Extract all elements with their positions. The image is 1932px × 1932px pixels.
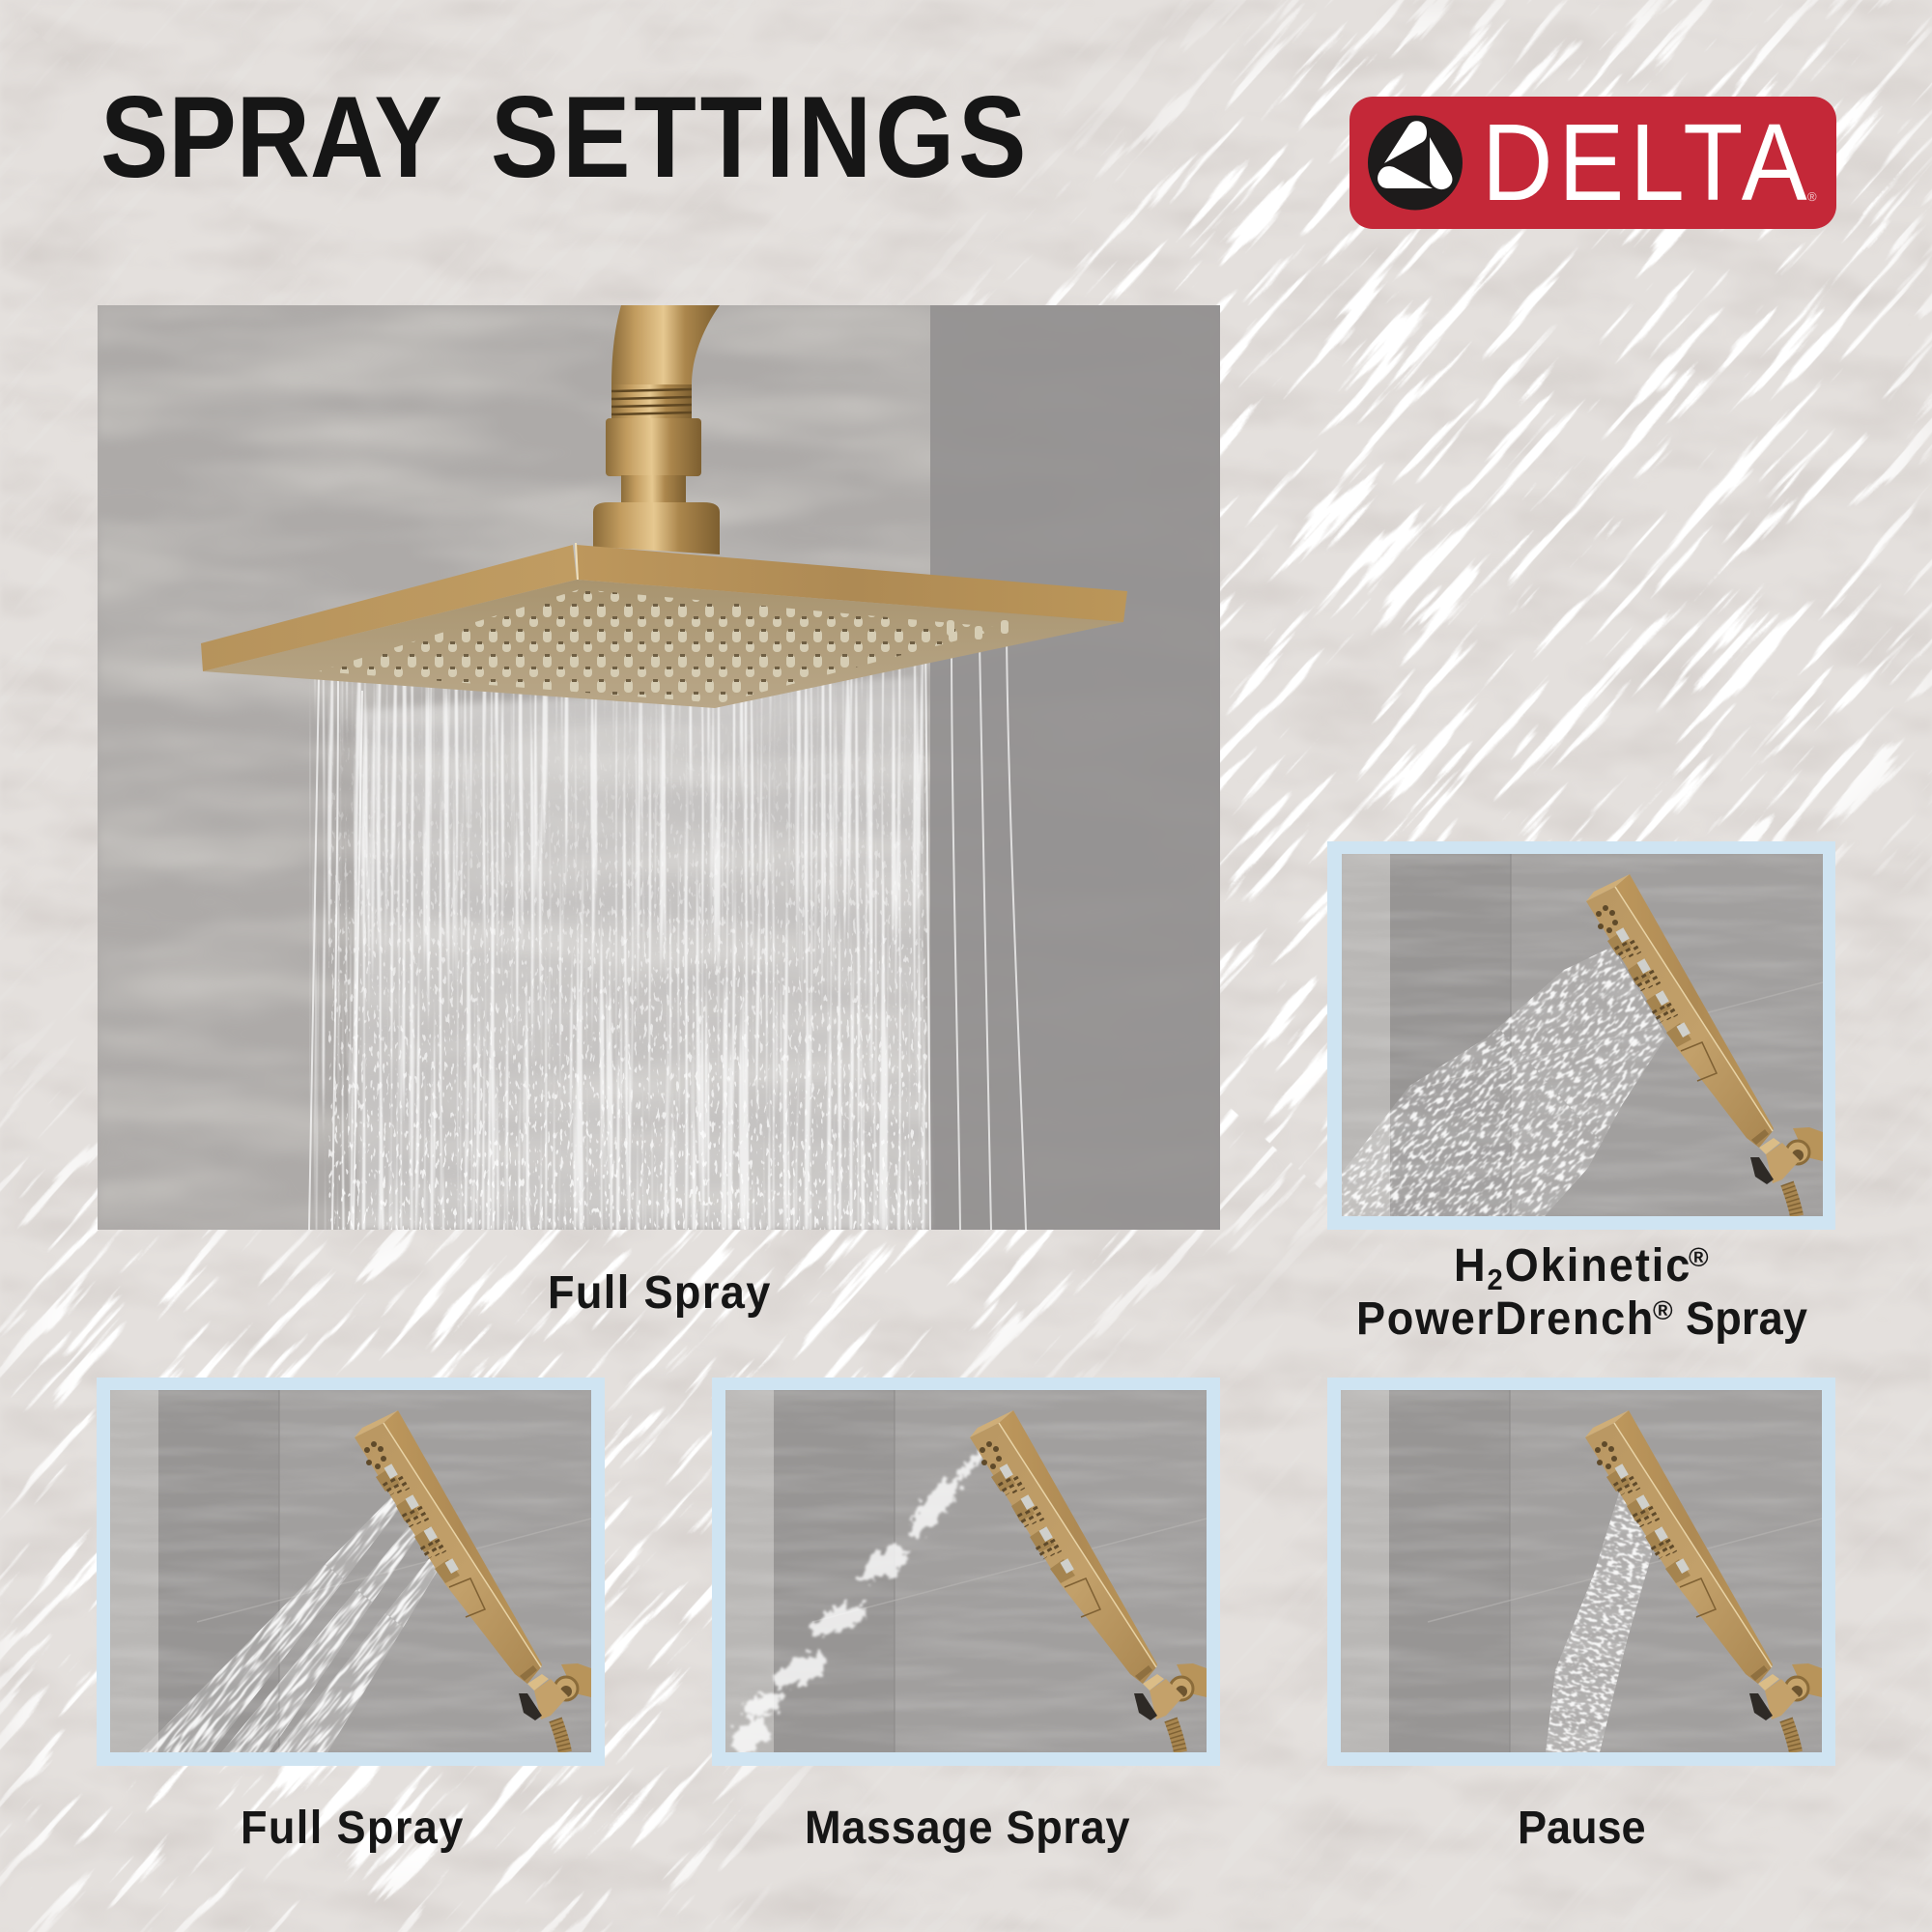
panel: rain shower head photo: [98, 305, 1220, 1230]
photo: hand shower pause: [1341, 1390, 1822, 1752]
shower arm: [611, 305, 720, 384]
panel: H2Okinetic PowerDrench spray: [1327, 841, 1835, 1230]
panel: hand shower full spray: [97, 1378, 605, 1766]
Delta logo: [1350, 97, 1836, 229]
label: Full Spray (rain head): Full Spray: [548, 1266, 770, 1318]
label: Full Spray (hand shower): Full Spray: [241, 1802, 463, 1853]
photo: hand shower massage spray: [724, 1390, 1207, 1762]
threaded connector: [611, 384, 692, 419]
label: H2Okinetic PowerDrench Spray: 2: [1488, 1264, 1503, 1296]
title: [100, 72, 1026, 201]
panel: hand shower pause trickle: [1327, 1378, 1835, 1766]
photo wall: [98, 305, 1220, 1230]
shower head: [201, 543, 1127, 708]
label: Massage Spray: Massage Spray: [805, 1802, 1130, 1853]
registered mark: ®: [1807, 189, 1817, 204]
label: H2Okinetic PowerDrench Spray: Okinetic: [1505, 1239, 1690, 1291]
brass nut and collar: [593, 418, 720, 554]
water streams: [309, 638, 1026, 1230]
title: SETTINGS: [491, 72, 1026, 201]
photo: hand shower full spray: [110, 1390, 591, 1752]
label: H2Okinetic PowerDrench Spray: PowerDrench: [1356, 1293, 1653, 1344]
label: H2Okinetic PowerDrench Spray: Spray: [1686, 1293, 1807, 1344]
label: H2Okinetic PowerDrench Spray: [1356, 1239, 1807, 1344]
title: SPRAY: [100, 72, 442, 201]
photo: hand shower drench: [1342, 854, 1823, 1216]
label: H2Okinetic PowerDrench Spray: ®: [1689, 1242, 1709, 1272]
panel: hand shower massage spray: [712, 1378, 1220, 1766]
label: Pause: Pause: [1518, 1802, 1646, 1853]
label: H2Okinetic PowerDrench Spray: H: [1454, 1239, 1486, 1291]
logo wordmark: DELTA: [1482, 101, 1807, 223]
label: H2Okinetic PowerDrench Spray: ®: [1653, 1295, 1673, 1325]
icon: Delta triangle mark: [1368, 116, 1463, 211]
